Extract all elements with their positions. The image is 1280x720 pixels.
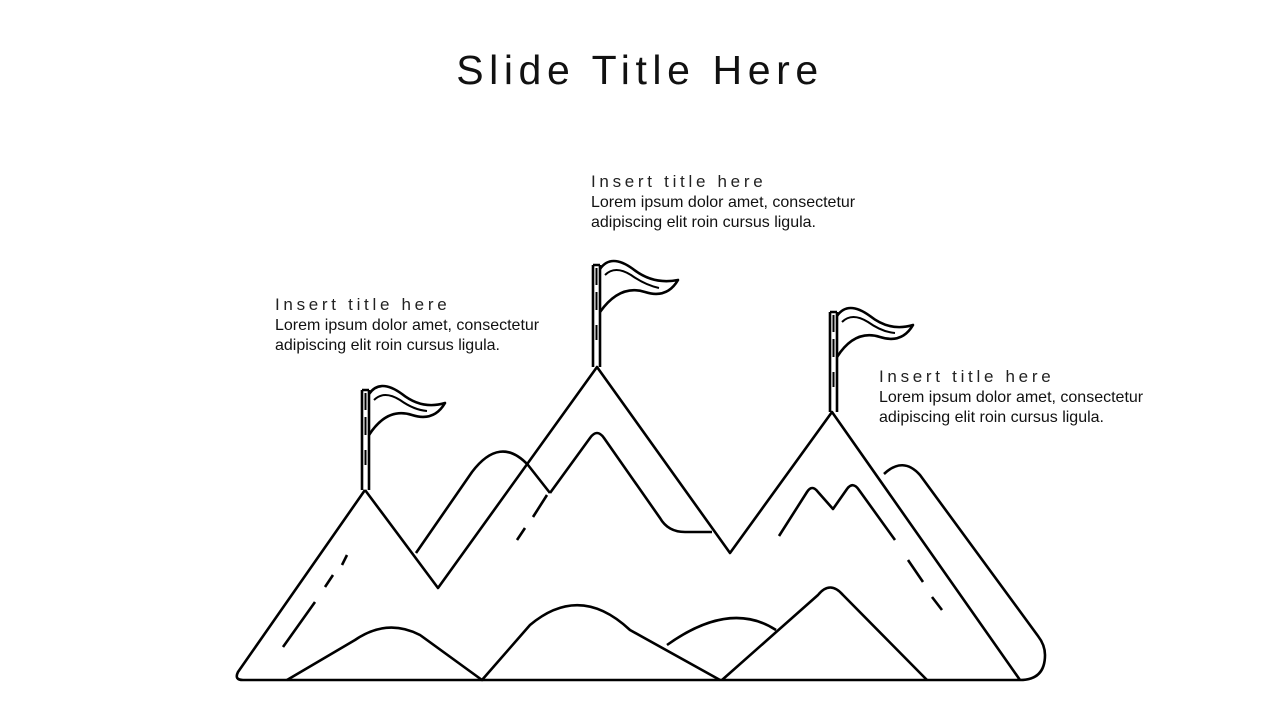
callout: right: Insert title here [879,367,1054,386]
inner big mountain [550,433,712,532]
callout: left: adipiscing elit roin cursus ligula. [275,337,500,354]
flag center [593,261,678,367]
lower hills [287,588,927,680]
callout: right: Lorem ipsum dolor amet, consectetur [879,389,1143,406]
mountain outline [237,367,1045,680]
flag left [362,386,445,490]
flag right [830,308,913,412]
callout: center: Insert title here [591,172,766,191]
callout: left: Lorem ipsum dolor amet, consectetur [275,317,539,334]
callout: left [275,295,539,354]
right mountain snow [779,485,895,540]
callout: right: adipiscing elit roin cursus ligula. [879,409,1104,426]
callout: center: Lorem ipsum dolor amet, consectetur [591,194,855,211]
dashes left mountain [283,555,347,647]
callout: right [879,367,1143,426]
behind hill [416,452,550,553]
callout: left: Insert title here [275,295,450,314]
callout: center: adipiscing elit roin cursus ligula. [591,214,816,231]
callout: center [591,172,855,231]
title: Slide Title Here [456,47,824,93]
dashes right mountain [908,560,942,610]
dashes big mountain [517,495,547,540]
